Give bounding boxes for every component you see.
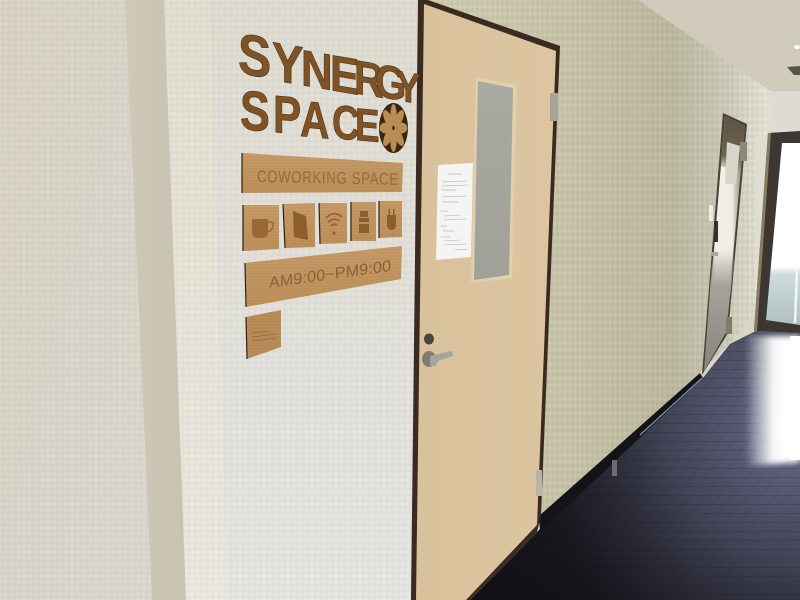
main door <box>411 0 560 600</box>
ceiling light <box>794 45 800 49</box>
sign: opening hours <box>245 246 402 307</box>
ceiling <box>638 0 800 92</box>
pillar <box>164 0 228 600</box>
floor sunlight reflection <box>745 336 800 466</box>
light switch <box>709 205 713 221</box>
far door hinges <box>740 142 747 161</box>
logo word: SPACE: A <box>300 90 329 150</box>
icon tile: coffee cup <box>243 205 279 251</box>
logo word: SYNERGY: R <box>354 49 384 109</box>
logo word: SYNERGY: E <box>330 45 359 107</box>
far end wall <box>755 91 800 336</box>
door window <box>471 77 517 283</box>
far door <box>702 113 747 375</box>
left wall <box>0 0 153 600</box>
sign: coworking space <box>242 153 403 193</box>
hours text: AM9:00~PM9:00 <box>269 257 391 292</box>
sign text: COWORKING SPACE <box>257 168 398 189</box>
logo word: SYNERGY: Y <box>396 61 421 114</box>
icon tile: wifi <box>319 203 347 244</box>
floor <box>470 330 800 600</box>
logo: Synergy Space <box>238 21 421 154</box>
door lock <box>424 334 434 344</box>
logo word: SYNERGY: Y <box>272 30 304 97</box>
logo word: SPACE: E <box>355 98 380 152</box>
small wooden plaque <box>246 310 281 359</box>
logo word: SYNERGY: G <box>375 54 406 112</box>
logo flower emblem <box>379 103 408 153</box>
logo word: SPACE: P <box>273 85 301 147</box>
floor blue sheen <box>576 331 800 600</box>
ceiling vent <box>787 66 800 75</box>
icon tile: book <box>283 203 315 248</box>
baseboard <box>539 373 703 532</box>
door handle <box>422 351 453 367</box>
end window <box>754 131 800 333</box>
door hinges <box>550 93 558 121</box>
notice sheet <box>436 163 473 260</box>
shaded wall band <box>125 0 186 600</box>
icon tile: power plug <box>379 201 402 238</box>
logo word: SPACE: C <box>332 96 360 152</box>
signage wall <box>210 0 425 600</box>
right corridor wall <box>425 0 770 530</box>
door stop <box>612 460 617 476</box>
icon tile: printer documents <box>351 202 376 241</box>
logo word: SYNERGY: S <box>238 21 271 91</box>
door frame <box>411 0 560 600</box>
logo word: SPACE: S <box>240 78 270 144</box>
logo word: SYNERGY: N <box>301 40 333 102</box>
far door lock <box>714 221 718 242</box>
door leaf <box>416 4 556 600</box>
